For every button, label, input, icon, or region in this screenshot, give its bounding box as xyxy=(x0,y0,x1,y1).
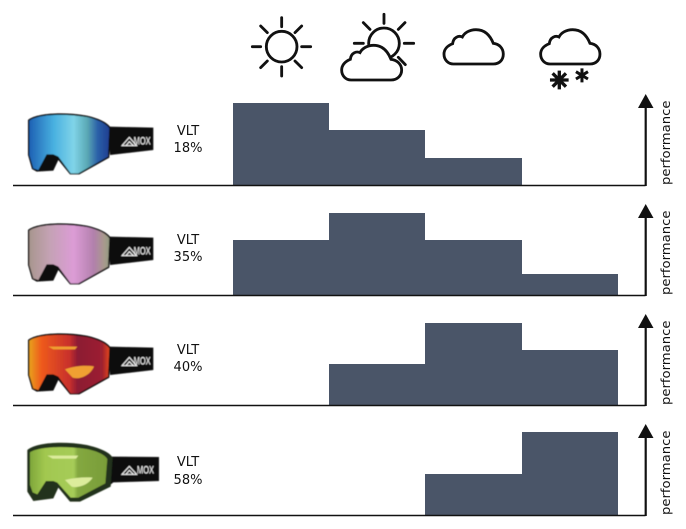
VLT value: 58% xyxy=(174,473,202,488)
goggles: pink mirror lens: MOX xyxy=(134,246,151,258)
goggles: blue mirror lens: MOX xyxy=(134,136,151,148)
goggles: green lens xyxy=(27,443,159,502)
goggles: red mirror lens xyxy=(28,333,153,394)
bar chart: 35% performance xyxy=(233,213,618,296)
baseline and arrow xyxy=(13,94,654,186)
baseline and arrow xyxy=(13,424,654,516)
bar chart: 40% performance xyxy=(329,323,618,406)
row 2: 35% lens xyxy=(13,204,673,296)
axis label: performance xyxy=(659,320,673,405)
weather icon: snow cloud xyxy=(541,30,600,89)
baseline and arrow xyxy=(13,314,654,406)
row 1: 18% lens xyxy=(13,94,673,186)
row 3: 40% lens xyxy=(13,314,673,406)
weather icon: cloud xyxy=(444,30,503,64)
row 4: 58% lens xyxy=(13,424,673,516)
bar chart: 18% performance xyxy=(233,103,522,186)
VLT value: 18% xyxy=(174,141,202,156)
axis label: performance xyxy=(659,210,673,295)
VLT value: 35% xyxy=(174,250,202,265)
VLT value: 40% xyxy=(174,360,202,375)
bar chart: 58% performance xyxy=(425,432,618,516)
baseline and arrow xyxy=(13,204,654,296)
goggles: pink mirror lens xyxy=(28,223,153,284)
goggles: green lens: MOX xyxy=(137,464,154,476)
VLT label: VLT xyxy=(177,233,199,248)
VLT label: VLT xyxy=(177,343,199,358)
weather icon: sun behind cloud xyxy=(342,14,414,80)
axis label: performance xyxy=(659,430,673,515)
goggles: red mirror lens: MOX xyxy=(134,356,151,368)
VLT label: VLT xyxy=(177,455,199,470)
weather icon: sun xyxy=(252,18,311,76)
VLT label: VLT xyxy=(177,124,199,139)
goggles: blue mirror lens xyxy=(28,113,153,174)
axis label: performance xyxy=(659,100,673,185)
